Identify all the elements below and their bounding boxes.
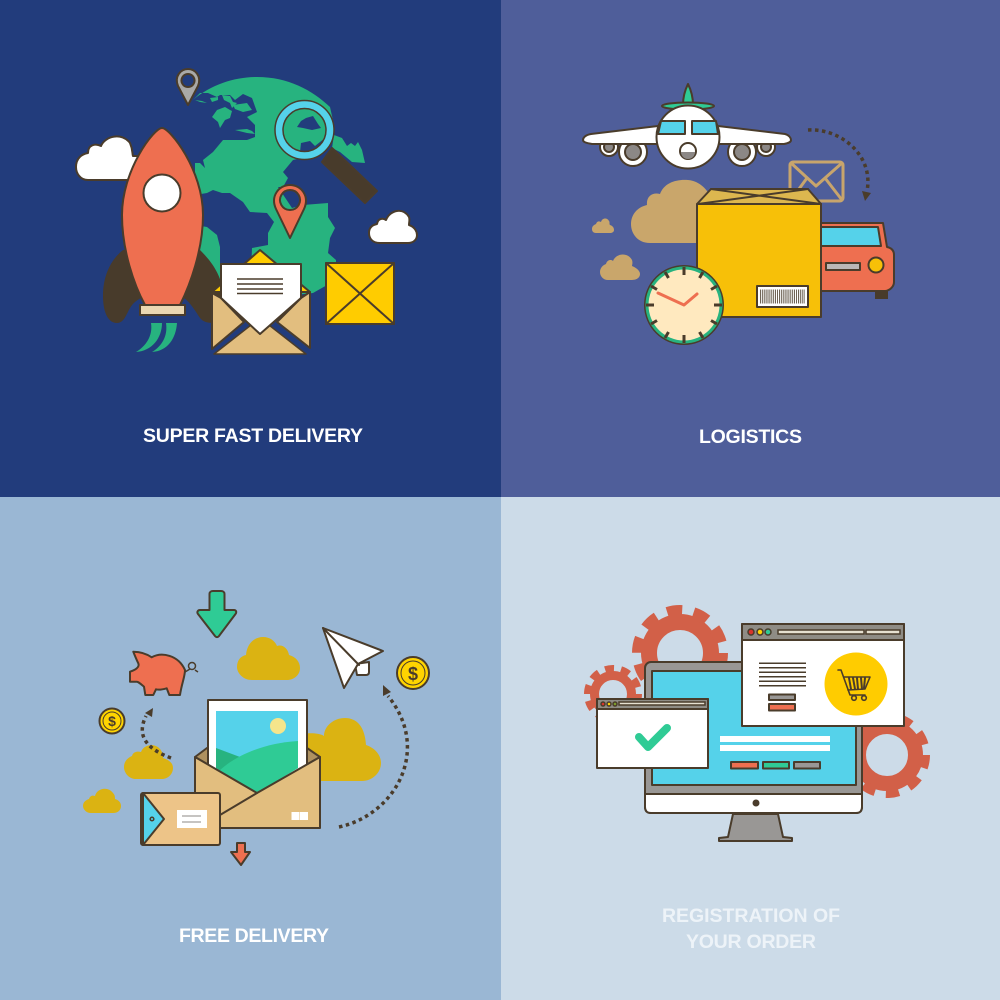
arrow: dotted curve [808,130,871,201]
panel: logistics [501,0,1000,497]
panel: super fast delivery [75,68,418,442]
icon: small tan cloud [592,218,614,233]
icon: piggy bank [130,652,198,695]
icon: rocket [103,128,225,352]
icon: gold cloud large [300,718,381,781]
icon: red down arrow [231,843,250,865]
icon: small gear [588,668,638,720]
icon: airplane [583,84,791,168]
icon: gold cloud left [124,745,173,779]
icon: shopping cart [838,670,870,700]
barcode [757,286,808,307]
icon: outlined envelope [790,162,843,201]
icon: gold cloud small [83,789,121,813]
icon: medium tan cloud [600,254,640,280]
heading: registration of your order [662,905,840,953]
icon: grey map pin [177,69,199,105]
icon: red car [815,223,894,299]
icon: small envelope [141,793,220,845]
icon: cardboard box [697,189,821,317]
icon: paper plane [323,628,383,688]
photo landscape [216,711,298,800]
icon: yellow envelope [326,263,394,324]
panel: registration of your order [501,497,1000,1000]
icon: green down arrow [197,591,236,637]
icon: confirmation browser window [597,699,708,768]
icon: large gear [638,611,722,695]
heading: logistics: LOGISTICS [699,426,802,448]
heading: registration of your order: REGISTRATION OF [662,905,840,927]
icon: small coin [100,708,124,734]
icon: right cloud [369,211,417,243]
panel: free delivery [0,497,501,1000]
icon: big open envelope with photo [195,700,320,828]
icon: right gear [849,717,925,793]
icon: shop browser window [742,624,904,726]
icon: open envelope with letter [212,250,310,354]
icon: large tan cloud [631,180,720,243]
icon: large coin [397,657,429,689]
icon: monitor [645,662,862,841]
icon: small coin: $ [108,713,116,729]
heading: super fast delivery: SUPER FAST DELIVERY [143,425,363,447]
heading: registration of your order: YOUR ORDER [686,931,816,953]
arrow: small dotted curve [142,708,171,758]
icon: orange map pin [274,185,306,238]
icon: magnifying glass [279,104,377,203]
icon: globe [193,77,365,300]
icon: clock [644,265,724,345]
icon: large coin: $ [408,664,418,684]
arrow: large dotted curve [339,685,407,827]
icon: left cloud [76,136,140,180]
icon: gold cloud top [237,637,300,680]
heading: free delivery: FREE DELIVERY [179,925,329,947]
